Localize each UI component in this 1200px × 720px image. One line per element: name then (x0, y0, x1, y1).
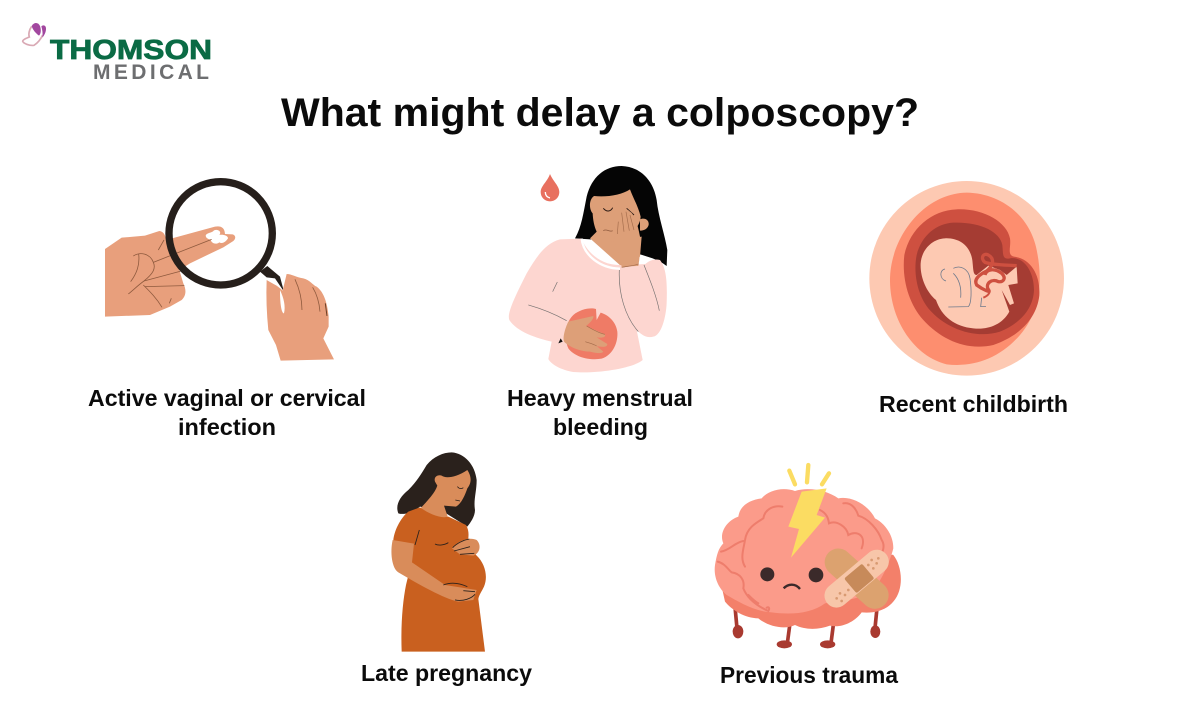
label: previous trauma: Previous trauma (720, 662, 898, 688)
hair (575, 166, 667, 266)
title: What might delay a colposcopy? (281, 91, 919, 135)
neck and face (590, 228, 642, 267)
finger creases (128, 239, 212, 307)
icon: butterfly heart (23, 23, 46, 45)
icon: fetus in womb (869, 181, 1064, 376)
label: heavy menstrual bleeding (507, 385, 693, 440)
brain main (715, 489, 893, 613)
womb layers (890, 193, 1040, 365)
fetus line detail (941, 267, 986, 307)
label: active infection (88, 385, 366, 440)
hands (564, 316, 607, 353)
fetus body (921, 238, 1018, 329)
blood drop (541, 174, 559, 201)
icon: hand under magnifying glass (105, 182, 334, 361)
brain folds (718, 503, 884, 611)
legs (735, 605, 877, 643)
label: heavy menstrual bleeding: Heavy menstrual (507, 385, 693, 411)
label: late pregnancy: Late pregnancy (361, 660, 532, 686)
infection patch (206, 230, 228, 244)
logo subtitle: MEDICAL (93, 61, 209, 84)
icon: hurt brain with bandage (715, 465, 901, 648)
neck and face (417, 470, 471, 523)
hands (452, 539, 480, 556)
eyes and mouth (760, 567, 823, 589)
dress (393, 507, 486, 652)
bandage (819, 543, 894, 614)
impact lines (789, 465, 829, 484)
icon: woman with heavy menstrual bleeding (509, 166, 667, 372)
arm (391, 540, 477, 602)
lightning bolt (788, 488, 827, 558)
label: heavy menstrual bleeding: bleeding (553, 414, 648, 440)
left hand (105, 226, 235, 317)
brain lower shade (722, 555, 901, 629)
logo wordmark: THOMSON (50, 34, 212, 65)
label: active infection: Active vaginal or cervical (88, 385, 366, 411)
icon: pregnant woman (391, 452, 486, 652)
umbilical cord (976, 254, 1017, 291)
label: recent childbirth: Recent childbirth (879, 391, 1068, 417)
hair (397, 452, 477, 527)
right hand (266, 274, 334, 361)
magnifying glass (169, 182, 272, 285)
sweater (509, 239, 667, 372)
logo: Thomson Medical (23, 23, 212, 84)
belly (566, 308, 617, 359)
label: active infection: infection (178, 414, 276, 440)
